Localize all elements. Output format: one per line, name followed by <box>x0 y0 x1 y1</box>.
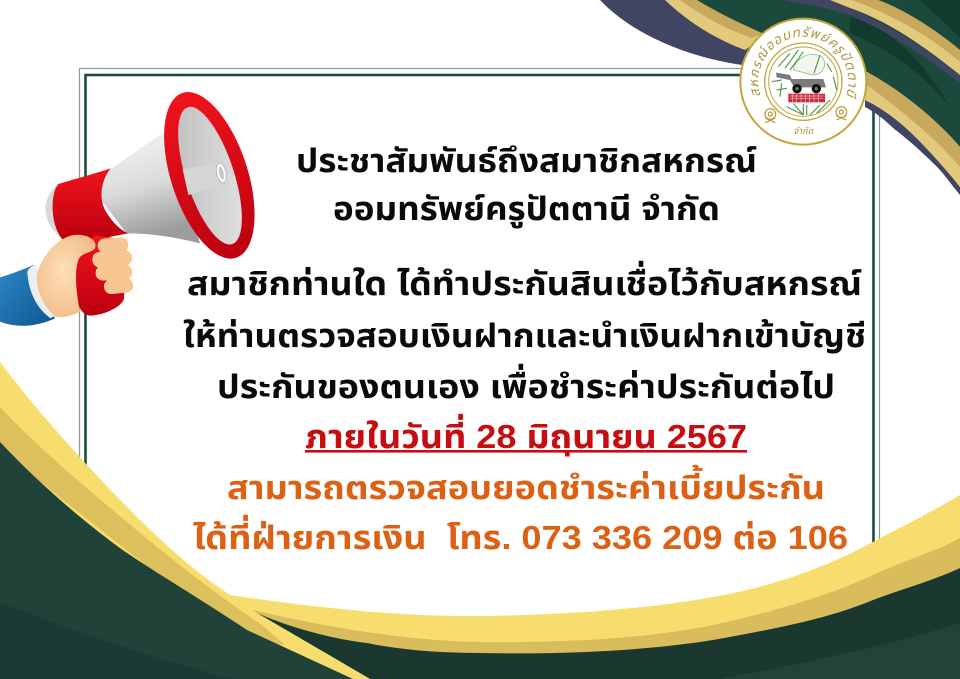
fingers <box>92 237 134 295</box>
logo bottom text: จำกัด <box>793 126 814 136</box>
shirt cuff <box>27 265 56 318</box>
cooperative logo <box>739 18 868 146</box>
logo red platform <box>788 94 825 102</box>
megaphone red collar <box>53 168 128 240</box>
deadline: ภายในวันที่ 28 มิถุนายน 2567 <box>305 413 747 457</box>
megaphone inner bell <box>165 100 255 252</box>
logo ring text: สหกรณ์ออมทรัพย์ครูปัตตานี <box>750 26 856 100</box>
contact line 1: สามารถตรวจสอบยอดชำระค่าเบี้ยประกัน <box>227 464 825 506</box>
megaphone with hand <box>0 81 273 326</box>
hand palm <box>37 235 96 317</box>
logo greenery <box>772 50 837 115</box>
bottom-right swoosh <box>230 495 960 679</box>
notice frame <box>80 68 880 628</box>
megaphone cone <box>98 132 200 243</box>
logo cannon <box>776 73 826 93</box>
megaphone rim <box>146 81 273 270</box>
body line 1: สมาชิกท่านใด ได้ทำประกันสินเชื่อไว้กับสหกรณ์ <box>187 260 862 302</box>
heading line 1: ประชาสัมพันธ์ถึงสมาชิกสหกรณ์ <box>296 142 757 179</box>
logo left emblem <box>765 109 776 123</box>
megaphone back cap <box>45 187 80 241</box>
logo hill <box>793 54 825 75</box>
bottom-left swoosh <box>0 362 370 679</box>
megaphone handle <box>74 235 127 316</box>
logo right emblem <box>836 107 847 120</box>
sleeve <box>0 265 55 326</box>
body line 2: ให้ท่านตรวจสอบเงินฝากและนำเงินฝากเข้าบัญชี <box>183 317 866 354</box>
body line 3: ประกันของตนเอง เพื่อชำระค่าประกันต่อไป <box>217 363 835 405</box>
top-right decorative swoosh <box>600 0 960 195</box>
contact line 2: ได้ที่ฝ่ายการเงิน โทร. 073 336 209 ต่อ 106 <box>193 514 848 556</box>
megaphone driver <box>183 162 228 195</box>
heading line 2: ออมทรัพย์ครูปัตตานี จำกัด <box>333 190 720 229</box>
